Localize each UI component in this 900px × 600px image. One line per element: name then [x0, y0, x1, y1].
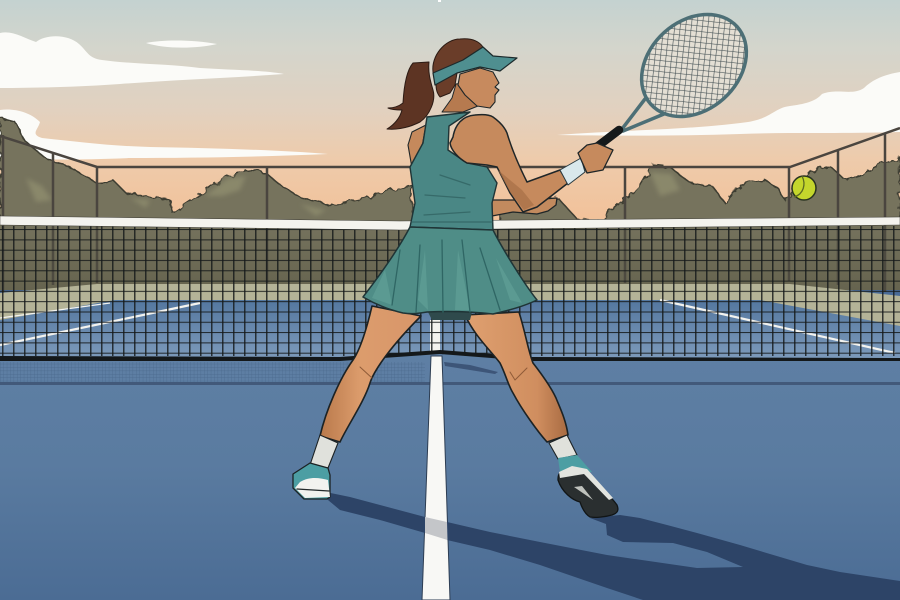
ponytail [387, 62, 434, 129]
tennis ball [792, 176, 816, 200]
back arm [492, 198, 557, 216]
shadow on center line [425, 517, 448, 540]
net bottom cable [0, 350, 900, 361]
player [293, 0, 767, 517]
neck [442, 82, 485, 112]
baseline shadow [0, 382, 900, 385]
visor [433, 47, 517, 85]
tree line [0, 118, 900, 230]
sky background [0, 0, 900, 222]
far court surround [0, 284, 900, 362]
skirt [363, 227, 537, 314]
left leg [320, 306, 421, 442]
right sock [549, 435, 577, 459]
net post shadow [444, 362, 498, 374]
clouds [0, 32, 900, 160]
net top tape [0, 216, 900, 230]
near court [0, 354, 900, 600]
bare back [408, 125, 426, 168]
far court lines [0, 300, 895, 353]
wall behind the net [0, 225, 900, 290]
raised arm [450, 115, 568, 212]
fence posts behind net [3, 225, 885, 296]
dress top [410, 112, 497, 230]
racket [598, 0, 767, 146]
right shoe [558, 455, 618, 517]
fence [0, 128, 900, 225]
wristband [560, 158, 585, 185]
left shoe [293, 463, 330, 499]
center service line [422, 356, 450, 600]
arm shadow [498, 170, 534, 210]
left sock [310, 435, 338, 468]
hand [578, 143, 613, 173]
far court [0, 300, 900, 362]
face [458, 68, 499, 108]
player shadow [316, 490, 900, 600]
net mesh [0, 226, 900, 356]
dress folds [412, 175, 492, 222]
fine net shadow band [0, 362, 425, 383]
right leg [465, 312, 568, 442]
under shorts [428, 312, 472, 320]
hair [433, 39, 483, 97]
knee creases [360, 367, 527, 380]
top edge mark [438, 0, 441, 2]
